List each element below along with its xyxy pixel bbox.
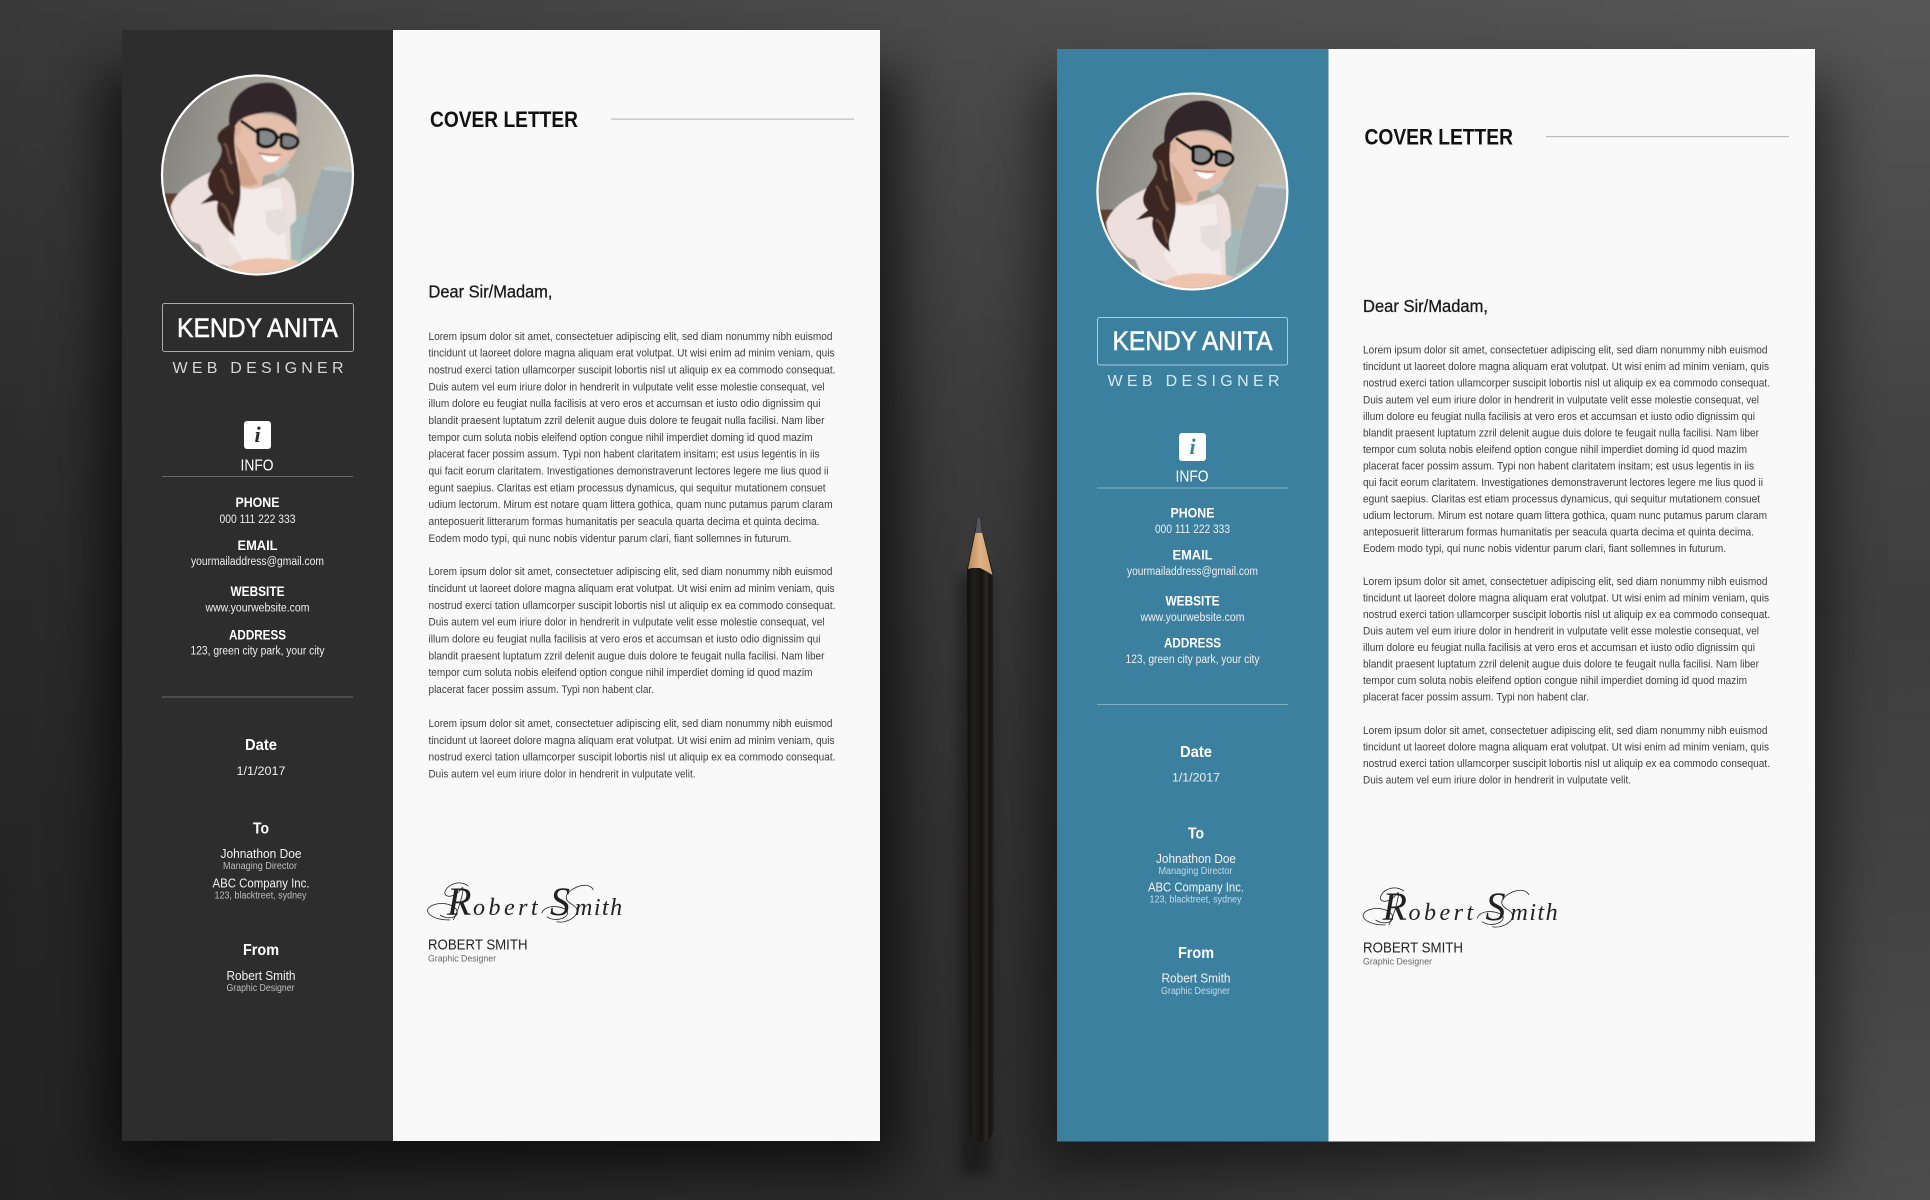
body paragraph 1: udium lectorum. Mirum est notare quam littera gothica, quam nunc putamus parum claram — [1363, 510, 1767, 522]
signature: mith — [575, 895, 624, 921]
dark sidebar — [122, 30, 393, 1141]
contact details: ADDRESS — [1164, 634, 1221, 650]
body paragraph 2: Lorem ipsum dolor sit amet, consectetuer adipiscing elit, sed diam nonummy nibh euismod — [1363, 576, 1768, 588]
sender block: Robert Smith — [226, 969, 296, 983]
date block: 1/1/2017 — [1172, 772, 1220, 784]
signature: obert — [473, 895, 541, 921]
body paragraph 3: Duis autem vel eum iriure dolor in hendrerit in vulputate velit. — [428, 768, 696, 780]
panel: blue cover letter page — [1057, 49, 1815, 1142]
body paragraph 1: anteposuerit litterarum formas humanitatis per seacula quarta decima et quinta decima. — [1363, 527, 1754, 539]
contact details — [190, 494, 325, 658]
body paragraph 1: Duis autem vel eum iriure dolor in hendrerit in vulputate velit esse molestie consequat, vel — [428, 381, 824, 393]
signature — [1363, 884, 1559, 929]
body paragraph 1 — [1363, 345, 1770, 555]
portrait photo — [1086, 88, 1305, 305]
signatory — [1363, 940, 1463, 967]
sender block — [226, 942, 296, 994]
body paragraph 2: tempor cum soluta nobis eleifend option congue nihil imperdiet doming id quod mazim — [1363, 675, 1747, 687]
body paragraph 1: placerat facer possim assum. Typi non habent claritatem insitam; est usus legentis in iis — [428, 449, 820, 461]
signature: mith — [1510, 900, 1559, 926]
letter title: COVER LETTER — [1364, 124, 1513, 149]
body paragraph 2: blandit praesent luptatum zzril delenit augue duis dolore te feugait nulla facilisi. Nam liber — [428, 650, 825, 662]
body paragraph 1: tincidunt ut laoreet dolore magna aliquam erat volutpat. Ut wisi enim ad minim veniam, quis — [428, 348, 835, 360]
date block — [1172, 744, 1220, 784]
signature: R — [1382, 884, 1407, 929]
body paragraph 2: illum dolore eu feugiat nulla facilisis at vero eros et accumsan et iusto odio dignissim qui — [428, 634, 820, 646]
contact details: ADDRESS — [229, 626, 286, 642]
letter sheet — [1328, 49, 1815, 1142]
job title: WEB DESIGNER — [172, 360, 344, 377]
name box: KENDY ANITA — [177, 313, 338, 343]
recipient block — [212, 820, 310, 902]
body paragraph 2: nostrud exerci tation ullamcorper suscipit lobortis nisl ut aliquip ex ea commodo consequat. — [1363, 609, 1770, 621]
body paragraph 2: Duis autem vel eum iriure dolor in hendrerit in vulputate velit esse molestie consequat, vel — [1363, 626, 1759, 638]
contact details: www.yourwebsite.com — [1140, 612, 1244, 624]
recipient block: To — [253, 820, 269, 838]
contact details: EMAIL — [238, 537, 278, 553]
body paragraph 2: tincidunt ut laoreet dolore magna aliquam erat volutpat. Ut wisi enim ad minim veniam, quis — [1363, 592, 1769, 604]
contact details: WEBSITE — [1166, 592, 1220, 608]
blue sidebar — [1057, 49, 1328, 1142]
signatory: ROBERT SMITH — [1363, 940, 1463, 956]
body paragraph 3: tincidunt ut laoreet dolore magna aliquam erat volutpat. Ut wisi enim ad minim veniam, quis — [1363, 741, 1769, 753]
signatory: ROBERT SMITH — [428, 936, 528, 954]
body paragraph 1: qui facit eorum claritatem. Investigationes demonstraverunt lectores legere me lius quod ii — [428, 466, 828, 478]
body paragraph 1: Eodem modo typi, qui nunc nobis videntur parum clari, fiant sollemnes in futurum. — [428, 533, 792, 545]
shadow: left page — [102, 70, 900, 1170]
contact details: 000 111 222 333 — [1155, 524, 1230, 536]
body paragraph 1: udium lectorum. Mirum est notare quam littera gothica, quam nunc putamus parum claram — [428, 499, 832, 511]
body paragraph 1: egunt saepius. Claritas est etiam processus dynamicus, qui sequitur mutationem consuet — [1363, 494, 1760, 506]
body paragraph 3 — [1363, 725, 1770, 786]
body paragraph 1: blandit praesent luptatum zzril delenit augue duis dolore te feugait nulla facilisi. Nam liber — [428, 415, 825, 427]
recipient block: 123, blacktreet, sydney — [1150, 895, 1242, 906]
body paragraph 1: anteposuerit litterarum formas humanitatis per seacula quarta decima et quinta decima. — [428, 516, 820, 528]
icon: info: i — [254, 422, 261, 447]
body paragraph 2: placerat facer possim assum. Typi non habent clar. — [428, 684, 654, 696]
job title: WEB DESIGNER — [1108, 373, 1280, 390]
recipient block: ABC Company Inc. — [212, 876, 310, 890]
sender block — [1161, 945, 1231, 997]
icon: info: i — [1189, 434, 1196, 459]
icon: pencil — [960, 518, 994, 1175]
icon: info — [1179, 433, 1206, 461]
sender block: Graphic Designer — [1161, 986, 1231, 997]
signature: R — [446, 879, 471, 924]
body paragraph 3 — [428, 718, 836, 780]
letter title: COVER LETTER — [430, 107, 578, 132]
contact details: WEBSITE — [230, 583, 284, 599]
body paragraph 2: tempor cum soluta nobis eleifend option congue nihil imperdiet doming id quod mazim — [428, 667, 812, 679]
letter sheet — [393, 30, 880, 1141]
signature: S — [550, 879, 570, 924]
name box — [162, 304, 354, 352]
info heading: INFO — [1176, 468, 1208, 485]
body paragraph 1: placerat facer possim assum. Typi non habent claritatem insitam; est usus legentis in iis — [1363, 460, 1754, 472]
body paragraph 3: tincidunt ut laoreet dolore magna aliquam erat volutpat. Ut wisi enim ad minim veniam, quis — [428, 735, 835, 747]
contact details: 123, green city park, your city — [1126, 654, 1260, 666]
body paragraph 1: nostrud exerci tation ullamcorper suscipit lobortis nisl ut aliquip ex ea commodo consequat. — [428, 364, 836, 376]
body paragraph 2: placerat facer possim assum. Typi non habent clar. — [1363, 692, 1589, 704]
body paragraph 1: qui facit eorum claritatem. Investigationes demonstraverunt lectores legere me lius quod ii — [1363, 477, 1763, 489]
signature — [428, 879, 624, 924]
body paragraph 1: egunt saepius. Claritas est etiam processus dynamicus, qui sequitur mutationem consuet — [428, 482, 826, 494]
signatory: Graphic Designer — [1363, 956, 1432, 967]
body paragraph 1: Lorem ipsum dolor sit amet, consectetuer adipiscing elit, sed diam nonummy nibh euismod — [1363, 345, 1768, 357]
contact details — [1126, 504, 1260, 666]
contact details: PHONE — [236, 494, 280, 510]
signatory: Graphic Designer — [428, 954, 496, 964]
salutation: Dear Sir/Madam, — [1363, 296, 1488, 316]
body paragraph 1: nostrud exerci tation ullamcorper suscipit lobortis nisl ut aliquip ex ea commodo consequat. — [1363, 378, 1770, 390]
body paragraph 2: illum dolore eu feugiat nulla facilisis at vero eros et accumsan et iusto odio dignissim qui — [1363, 642, 1755, 654]
body paragraph 3: Lorem ipsum dolor sit amet, consectetuer adipiscing elit, sed diam nonummy nibh euismod — [1363, 725, 1768, 737]
body paragraph 2: tincidunt ut laoreet dolore magna aliquam erat volutpat. Ut wisi enim ad minim veniam, quis — [428, 583, 835, 595]
body paragraph 1: tempor cum soluta nobis eleifend option congue nihil imperdiet doming id quod mazim — [1363, 444, 1747, 456]
date block: Date — [245, 737, 277, 754]
recipient block: ABC Company Inc. — [1148, 881, 1244, 895]
recipient block: To — [1188, 825, 1204, 842]
sender block: From — [243, 942, 279, 959]
recipient block: Managing Director — [1158, 866, 1233, 877]
signatory — [428, 936, 528, 964]
body paragraph 2: Lorem ipsum dolor sit amet, consectetuer adipiscing elit, sed diam nonummy nibh euismod — [428, 566, 832, 578]
body paragraph 1: Lorem ipsum dolor sit amet, consectetuer adipiscing elit, sed diam nonummy nibh euismod — [428, 331, 832, 343]
sender block: Robert Smith — [1162, 972, 1231, 986]
body paragraph 1: tempor cum soluta nobis eleifend option congue nihil imperdiet doming id quod mazim — [428, 432, 812, 444]
name box: KENDY ANITA — [1112, 326, 1272, 356]
signature: obert — [1408, 900, 1477, 926]
body paragraph 3: nostrud exerci tation ullamcorper suscipit lobortis nisl ut aliquip ex ea commodo consequat. — [1363, 758, 1770, 770]
body paragraph 1: Eodem modo typi, qui nunc nobis videntur parum clari, fiant sollemnes in futurum. — [1363, 543, 1726, 555]
name box — [1098, 318, 1288, 365]
contact details: yourmailaddress@gmail.com — [191, 556, 324, 568]
contact details: EMAIL — [1172, 546, 1213, 562]
contact details: 123, green city park, your city — [190, 646, 325, 658]
panel: dark cover letter page — [122, 30, 880, 1141]
body paragraph 1: illum dolore eu feugiat nulla facilisis at vero eros et accumsan et iusto odio dignissim qui — [1363, 411, 1755, 423]
body paragraph 2: nostrud exerci tation ullamcorper suscipit lobortis nisl ut aliquip ex ea commodo consequat. — [428, 600, 836, 612]
body paragraph 2: blandit praesent luptatum zzril delenit augue duis dolore te feugait nulla facilisi. Nam liber — [1363, 658, 1759, 670]
salutation: Dear Sir/Madam, — [428, 282, 552, 302]
recipient block: 123, blacktreet, sydney — [214, 890, 306, 902]
icon: info — [244, 421, 271, 449]
body paragraph 1: blandit praesent luptatum zzril delenit augue duis dolore te feugait nulla facilisi. Nam liber — [1363, 427, 1759, 439]
portrait photo — [150, 70, 370, 290]
recipient block: Johnathon Doe — [1156, 852, 1236, 866]
date block: Date — [1180, 744, 1212, 761]
body paragraph 1: Duis autem vel eum iriure dolor in hendrerit in vulputate velit esse molestie consequat, vel — [1363, 394, 1759, 406]
shadow: right page — [1040, 80, 1830, 1170]
sender block: From — [1178, 945, 1214, 962]
recipient block — [1148, 825, 1244, 906]
body paragraph 3: Duis autem vel eum iriure dolor in hendrerit in vulputate velit. — [1363, 774, 1631, 786]
body paragraph 1: tincidunt ut laoreet dolore magna aliquam erat volutpat. Ut wisi enim ad minim veniam, quis — [1363, 361, 1769, 373]
body paragraph 2 — [1363, 576, 1770, 704]
date block: 1/1/2017 — [236, 766, 286, 778]
body paragraph 2 — [428, 566, 836, 696]
body paragraph 3: nostrud exerci tation ullamcorper suscipit lobortis nisl ut aliquip ex ea commodo consequat. — [428, 752, 836, 764]
contact details: 000 111 222 333 — [220, 514, 296, 526]
contact details: PHONE — [1170, 504, 1214, 520]
body paragraph 1 — [428, 331, 836, 545]
body paragraph 2: Duis autem vel eum iriure dolor in hendrerit in vulputate velit esse molestie consequat, vel — [428, 617, 824, 629]
signature: S — [1486, 884, 1506, 929]
contact details: www.yourwebsite.com — [205, 602, 310, 614]
body paragraph 3: Lorem ipsum dolor sit amet, consectetuer adipiscing elit, sed diam nonummy nibh euismod — [428, 718, 832, 730]
recipient block: Managing Director — [223, 861, 298, 872]
sender block: Graphic Designer — [226, 983, 295, 994]
body paragraph 1: illum dolore eu feugiat nulla facilisis at vero eros et accumsan et iusto odio dignissim qui — [428, 398, 820, 410]
contact details: yourmailaddress@gmail.com — [1127, 566, 1258, 578]
info heading: INFO — [240, 458, 274, 474]
recipient block: Johnathon Doe — [220, 847, 302, 861]
date block — [236, 737, 286, 778]
